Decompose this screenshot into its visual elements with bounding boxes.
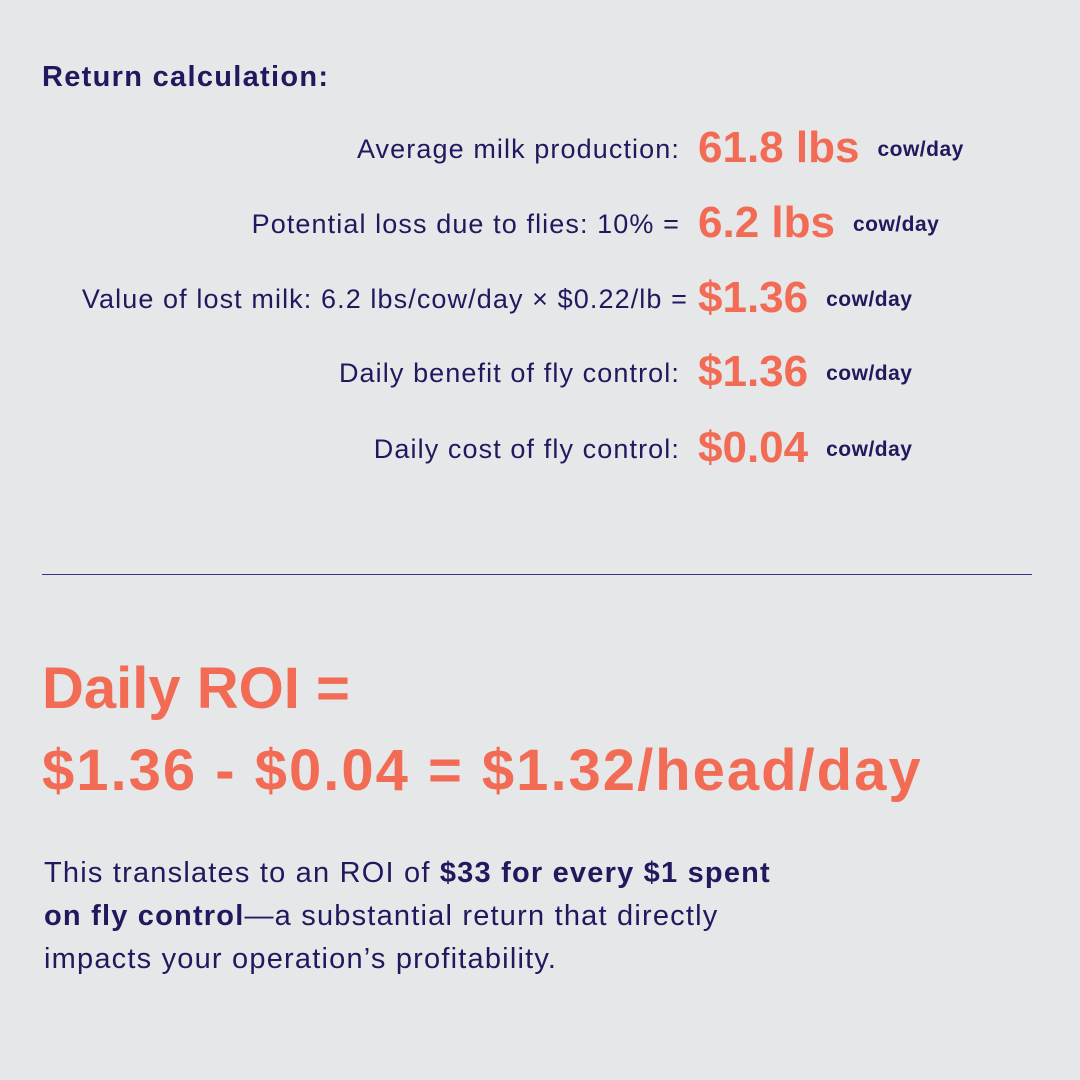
row: daily benefit: $1.36 cow/day <box>698 347 912 396</box>
row: daily benefit: Daily benefit of fly control: <box>339 358 680 388</box>
row: average milk production: Average milk production: <box>357 134 680 164</box>
row: potential loss: Potential loss due to flies: 10% = <box>252 209 680 239</box>
ROI heading: $1.36 - $0.04 = $1.32/head/day <box>42 738 923 803</box>
row: daily cost <box>374 423 912 472</box>
title: Return calculation: <box>42 61 329 93</box>
row: average milk production <box>357 123 964 172</box>
row: value of lost milk: $1.36 cow/day <box>698 273 912 322</box>
row: daily cost: $0.04 cow/day <box>698 423 912 472</box>
paragraph <box>44 857 771 975</box>
row: average milk production: 61.8 lbs cow/day <box>698 123 964 172</box>
row: daily benefit <box>339 347 912 396</box>
paragraph: This translates to an ROI of $33 for every $1 spent <box>44 857 771 889</box>
ROI heading: Daily ROI = <box>42 656 350 721</box>
paragraph: on fly control—a substantial return that directly impacts your operation’s profitability. <box>44 900 718 975</box>
ROI heading <box>42 656 923 803</box>
row: potential loss: 6.2 lbs cow/day <box>698 198 939 247</box>
row: potential loss <box>252 198 939 247</box>
row: daily cost: Daily cost of fly control: <box>374 434 680 464</box>
row: value of lost milk: Value of lost milk: 6.2 lbs/cow/day × $0.22/lb = <box>82 284 688 314</box>
row: value of lost milk <box>82 273 912 322</box>
